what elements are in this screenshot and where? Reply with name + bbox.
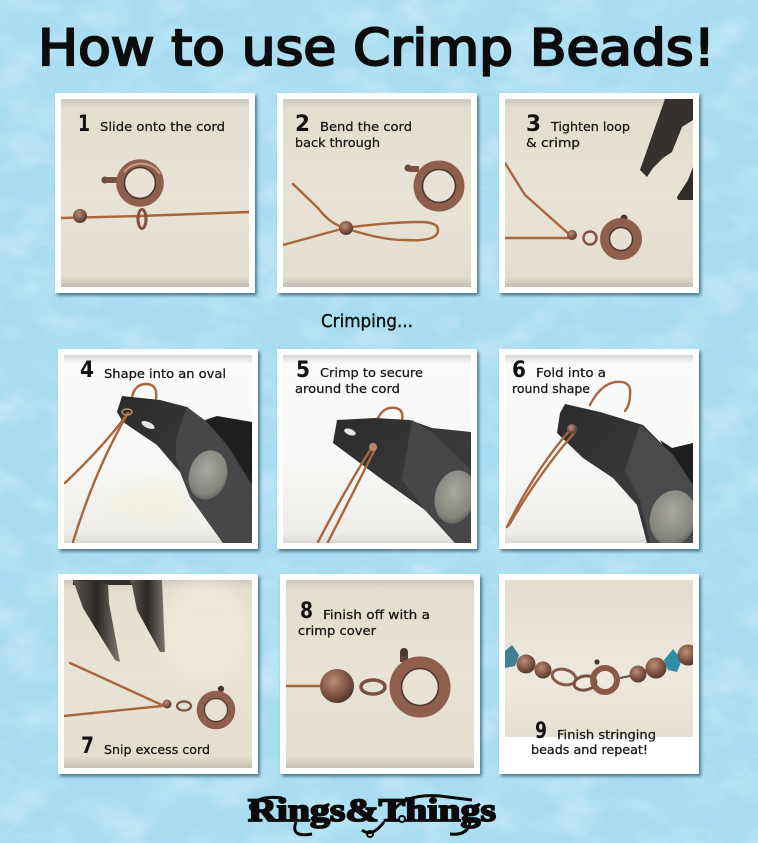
panel: step 5	[277, 349, 481, 549]
panel: step 8	[280, 574, 480, 774]
step 6 caption: 6	[512, 358, 526, 383]
panel: step 3	[499, 93, 699, 293]
photo: pliers shaping crimp	[64, 355, 252, 543]
panel: step 6	[499, 349, 702, 551]
step 9 caption: 9	[535, 719, 547, 744]
step 5 caption	[295, 358, 423, 396]
photo: snipping excess cord	[64, 580, 252, 768]
step 4 caption: Shape into an oval	[104, 366, 226, 381]
step 2 caption	[295, 112, 412, 150]
step 6 caption	[512, 358, 606, 396]
step 3 caption: Tighten loop	[550, 119, 630, 134]
title: How to use Crimp Beads!	[38, 19, 715, 77]
step 9 caption: beads and repeat!	[531, 742, 648, 757]
step 6 caption: Fold into a	[536, 365, 606, 380]
logo: Rings & Things	[248, 793, 496, 837]
step 8 caption: crimp cover	[298, 623, 377, 638]
step 7 caption: Snip excess cord	[104, 742, 210, 757]
panel: step 9	[499, 574, 699, 774]
step 2 caption: 2	[295, 112, 310, 137]
logo: Rings & Things: Rings&Things	[248, 793, 496, 829]
step 3 caption: 3	[526, 112, 541, 137]
step 1 caption: 1	[78, 112, 90, 137]
step 9 caption: Finish stringing	[557, 727, 656, 742]
step 1 caption	[78, 112, 225, 137]
step 5 caption: Crimp to secure	[320, 365, 423, 380]
step 5 caption: 5	[296, 358, 310, 383]
photo: pliers folding crimp	[505, 355, 702, 551]
step 5 caption: around the cord	[295, 381, 400, 396]
step 9 caption	[531, 719, 656, 757]
step 1 caption: Slide onto the cord	[100, 119, 225, 134]
panel: step 2	[277, 93, 477, 293]
step 2 caption: back through	[295, 135, 380, 150]
photo: crimp cover and clasp	[286, 580, 474, 768]
photo: clasp and cord	[61, 99, 249, 287]
photo: tightened loop with pliers	[505, 99, 693, 287]
photo: finished necklace clasp	[505, 580, 698, 737]
step 7 caption: 7	[81, 734, 94, 759]
step 2 caption: Bend the cord	[320, 119, 412, 134]
step 8 caption: 8	[300, 599, 313, 624]
step 3 caption	[526, 112, 630, 150]
step 8 caption: Finish off with a	[323, 607, 430, 622]
heading: crimping: Crimping...	[321, 311, 413, 332]
step 3 caption: & crimp	[526, 135, 580, 150]
photo: pliers crimping	[283, 355, 481, 543]
photo: bent cord through bead	[283, 99, 471, 287]
step 4 caption	[80, 358, 226, 383]
step 4 caption: 4	[80, 358, 94, 383]
step 7 caption	[81, 734, 210, 759]
panel: step 1	[55, 93, 255, 293]
panel: step 7	[58, 574, 258, 774]
step 8 caption	[298, 599, 430, 638]
step 6 caption: round shape	[512, 381, 590, 396]
panel: step 4	[58, 349, 258, 549]
